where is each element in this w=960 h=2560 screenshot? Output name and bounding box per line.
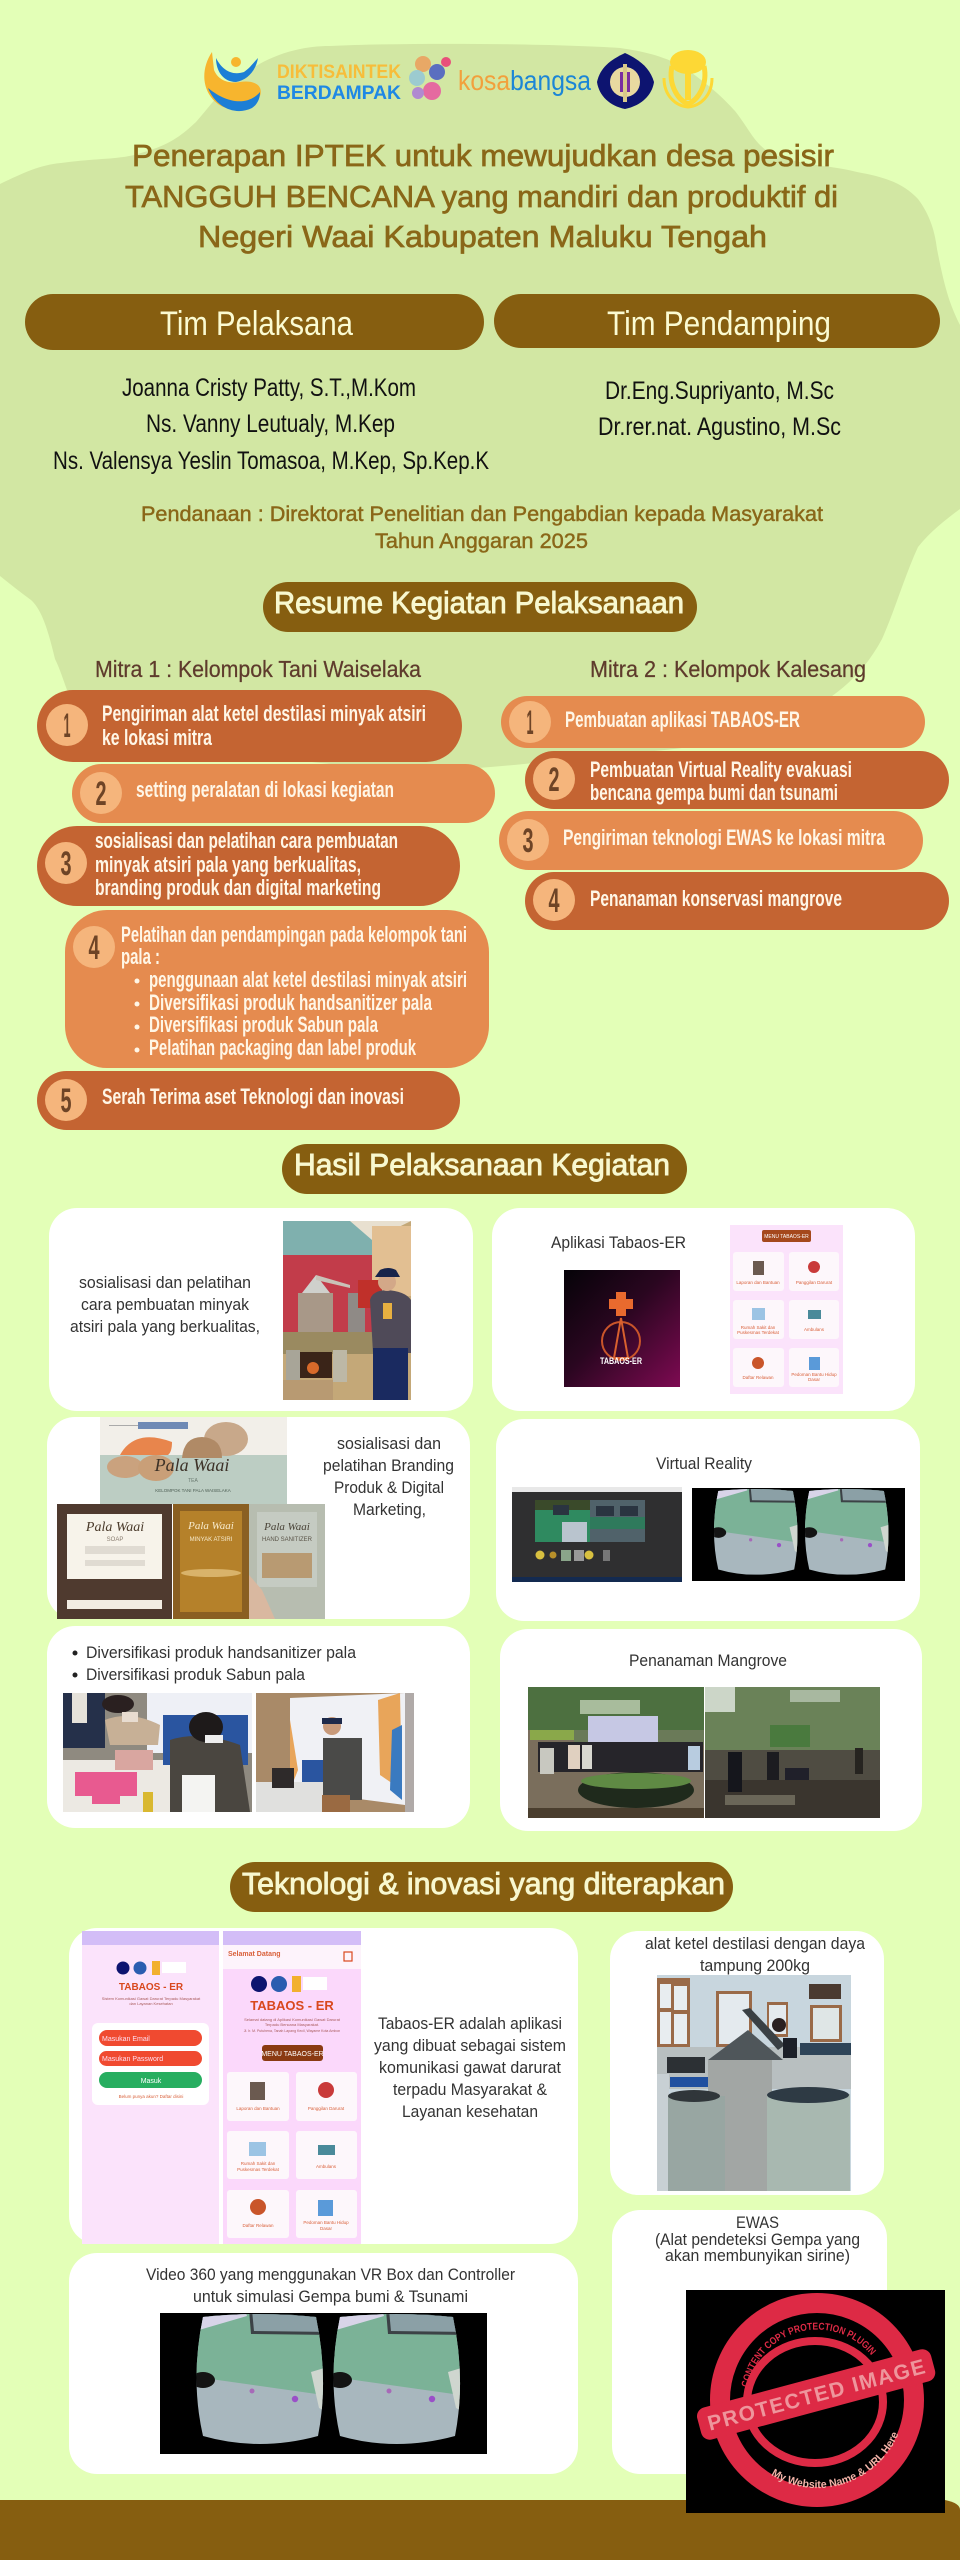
step 5	[37, 1071, 460, 1130]
screenshot: menu: Selamat Datang	[228, 1951, 281, 1958]
funding text: Pendanaan : Direktorat Penelitian dan Pengabdian kepada Masyarakat	[141, 503, 823, 526]
panel: sosialisasi minyak atsiri	[49, 1208, 473, 1411]
title: TANGGUH BENCANA yang mandiri dan produktif di	[125, 179, 838, 214]
panel: EWAS: (Alat pendeteksi Gempa yang	[655, 2230, 860, 2249]
panel: EWAS: EWAS	[736, 2213, 779, 2232]
background blob	[0, 44, 960, 769]
app menu screenshot: Puskesmas Terdekat	[737, 1330, 780, 1335]
panel: Penanaman Mangrove	[500, 1629, 922, 1831]
logo: university shield	[597, 53, 654, 109]
screenshot: login: Masuk	[141, 2078, 162, 2085]
step 4: Diversifikasi produk Sabun pala	[149, 1012, 379, 1037]
step 3: 3	[522, 822, 534, 860]
poster: hand sanitizer: Pala Waai	[263, 1521, 310, 1533]
screenshot: menu: Jl. Ir. M. Putuhena, Tanah Lapang Kecil, Wayame Kota Ambon	[244, 2029, 340, 2033]
icon: Tabaos-ER app	[564, 1270, 680, 1387]
app menu screenshot	[730, 1225, 843, 1394]
step 4: 4	[88, 929, 100, 967]
logos row	[204, 50, 712, 111]
protected image stamp: CONTENT COPY PROTECTION PLUGIN	[742, 2322, 876, 2386]
panel: Mitra 2 steps	[499, 696, 949, 930]
screenshot: menu: Dasar	[320, 2226, 332, 2231]
step 4: 4	[548, 882, 560, 920]
description text: yang dibuat sebagai sistem	[374, 2036, 566, 2055]
screenshot: VR stereo view	[692, 1486, 905, 1581]
panel: diversifikasi produk: Diversifikasi produk handsanitizer pala	[86, 1643, 357, 1662]
panel: Video 360	[69, 2253, 578, 2474]
screenshot: login: Belum punya akun? Daftar disini	[119, 2094, 183, 2099]
step 2: 2	[96, 775, 106, 813]
step 4: penggunaan alat ketel destilasi minyak atsiri	[149, 967, 467, 992]
heading: Mitra 2: Mitra 2 : Kelompok Kalesang	[590, 656, 866, 682]
logo: gold emblem	[664, 50, 712, 107]
panel: branding produk: Marketing,	[353, 1500, 426, 1519]
screenshot: menu: Daftar Relawan	[242, 2223, 274, 2228]
step 2: Pembuatan Virtual Reality evakuasi	[590, 757, 852, 782]
panel: Mitra 1 steps	[37, 690, 495, 1130]
step 3	[37, 826, 460, 906]
panel: branding produk	[47, 1417, 470, 1619]
screenshot: login: dan Layanan Kesehatan	[129, 2001, 173, 2006]
poster: soap	[57, 1504, 172, 1619]
heading: Mitra 1: Mitra 1 : Kelompok Tani Waiselaka	[95, 656, 421, 682]
screenshot: menu	[223, 1931, 361, 2244]
photo: distillation kettles	[657, 1975, 851, 2191]
heading pill: Tim Pendamping: Tim Pendamping	[607, 305, 831, 343]
screenshot: menu: TABAOS - ER	[250, 1998, 334, 2013]
app menu screenshot: Panggilan Darurat	[796, 1280, 833, 1285]
panel: branding produk: sosialisasi dan	[337, 1434, 441, 1453]
step 2	[72, 764, 495, 823]
panel: sosialisasi minyak atsiri: cara pembuatan minyak	[81, 1295, 249, 1314]
title: Penerapan IPTEK untuk mewujudkan desa pesisir	[132, 138, 834, 173]
poster: soap: Pala Waai	[85, 1520, 144, 1535]
poster: Pala Waai nutmeg: Pala Waai	[154, 1455, 229, 1475]
poster: soap: SOAP	[107, 1537, 123, 1543]
heading pill: Tim Pendamping	[494, 294, 940, 348]
description text: Tabaos-ER adalah aplikasi	[378, 2014, 562, 2033]
screenshot: login: Sistem Komunikasi Gawat Darurat Terpadu Masyarakat	[102, 1996, 201, 2001]
step 4: pala :	[121, 944, 160, 969]
names: Tim Pelaksana: Joanna Cristy Patty, S.T.,M.Kom	[122, 374, 416, 402]
names: Tim Pelaksana	[53, 374, 489, 475]
step 1: 1	[526, 704, 534, 742]
funding text: Tahun Anggaran 2025	[375, 530, 588, 553]
panel: Virtual Reality	[496, 1419, 920, 1621]
screenshot: login	[82, 1931, 219, 2244]
heading: Hasil Pelaksanaan Kegiatan	[282, 1144, 687, 1194]
panel: branding produk: pelatihan Branding	[323, 1456, 454, 1475]
screenshot: menu: MENU TABAOS-ER	[261, 2051, 324, 2058]
screenshot: menu: Terpadu Bencana Masyarakat.	[265, 2022, 319, 2027]
logo text: DIKTISAINTEK BERDAMPAK: DIKTISAINTEK	[277, 62, 401, 83]
photo: product workshop	[63, 1693, 252, 1812]
step 1	[37, 690, 462, 762]
icon: Tabaos-ER app: TABAOS-ER	[600, 1356, 642, 1366]
description text: terpadu Masyarakat &	[393, 2080, 548, 2099]
step 2: 2	[548, 761, 560, 799]
poster: hand sanitizer	[249, 1504, 325, 1619]
step 4: Penanaman konservasi mangrove	[590, 886, 842, 911]
poster: Pala Waai nutmeg	[100, 1417, 287, 1504]
panel: EWAS	[612, 2210, 887, 2474]
description text: komunikasi gawat darurat	[379, 2058, 561, 2077]
description text: Layanan kesehatan	[402, 2102, 538, 2121]
step 2: bencana gempa bumi dan tsunami	[590, 780, 838, 805]
step 3: 3	[60, 845, 72, 883]
panel: ketel destilasi: alat ketel destilasi dengan daya	[645, 1934, 865, 1953]
logo: kosabangsa mark	[409, 56, 451, 100]
app menu screenshot: Laporan dan Bantuan	[736, 1280, 780, 1285]
title: Negeri Waai Kabupaten Maluku Tengah	[198, 219, 767, 254]
app menu screenshot: Pedoman Bantu Hidup	[791, 1372, 837, 1377]
heading: Teknologi & inovasi yang diterapkan	[230, 1862, 733, 1912]
heading: Resume Kegiatan Pelaksanaan: Resume Kegiatan Pelaksanaan	[274, 585, 684, 620]
screenshot: login: Masukan Password	[102, 2056, 163, 2063]
names: Tim Pelaksana: Ns. Valensya Yeslin Tomasoa, M.Kep, Sp.Kep.K	[53, 447, 489, 475]
heading: Hasil Pelaksanaan Kegiatan: Hasil Pelaksanaan Kegiatan	[294, 1147, 670, 1182]
step 1: ke lokasi mitra	[102, 725, 213, 750]
title	[125, 138, 838, 254]
step 1: Pengiriman alat ketel destilasi minyak atsiri	[102, 701, 426, 726]
heading: Teknologi & inovasi yang diterapkan: Teknologi & inovasi yang diterapkan	[242, 1866, 725, 1901]
screenshot: menu: Rumah Sakit dan	[241, 2161, 276, 2166]
panel: EWAS: akan membunyikan sirine)	[665, 2246, 850, 2265]
step 1: 1	[64, 707, 70, 745]
logo text: DIKTISAINTEK BERDAMPAK: BERDAMPAK	[277, 83, 401, 104]
screenshot: menu: Selamat datang di Aplikasi Komunikasi Gawat Darurat	[244, 2017, 341, 2022]
poster: Pala Waai nutmeg: KELOMPOK TANI PALA WAISELAKA	[155, 1488, 231, 1493]
panel: sosialisasi minyak atsiri: sosialisasi dan pelatihan	[79, 1273, 251, 1292]
screenshot: menu: Ambulans	[316, 2164, 337, 2169]
panel: branding produk: Produk & Digital	[334, 1478, 444, 1497]
app menu screenshot: Ambulans	[804, 1327, 825, 1332]
screenshot: login: TABAOS - ER	[119, 1982, 184, 1993]
step 3: minyak atsiri pala yang berkualitas,	[95, 852, 361, 877]
names: Tim Pendamping: Dr.Eng.Supriyanto, M.Sc	[605, 377, 834, 405]
app menu screenshot: Daftar Relawan	[742, 1375, 774, 1380]
photo: planting in mud	[705, 1687, 880, 1818]
panel: Aplikasi Tabaos-ER	[492, 1208, 915, 1411]
panel: Video 360: untuk simulasi Gempa bumi & Tsunami	[193, 2287, 468, 2306]
photo: group with seedlings	[528, 1687, 704, 1818]
photo: distillation kettle with man	[283, 1221, 411, 1400]
panel: Virtual Reality: Virtual Reality	[656, 1454, 752, 1473]
screenshot: menu: Panggilan Darurat	[308, 2106, 345, 2111]
panel: Penanaman Mangrove: Penanaman Mangrove	[629, 1651, 787, 1670]
screenshot: menu: Laporan dan Bantuan	[236, 2106, 280, 2111]
panel: ketel destilasi: tampung 200kg	[700, 1956, 810, 1975]
logo: Diktisaintek Berdampak	[204, 52, 261, 111]
step 2	[525, 751, 949, 809]
step 4: Pelatihan packaging dan label produk	[149, 1035, 417, 1060]
panel: Video 360: Video 360 yang menggunakan VR Box dan Controller	[146, 2265, 515, 2284]
app menu screenshot: Dasar	[808, 1377, 820, 1382]
protected image stamp	[686, 2290, 945, 2513]
panel: Tabaos-ER app	[69, 1928, 578, 2244]
description text	[374, 2014, 566, 2121]
step 4: Pelatihan dan pendampingan pada kelompok tani	[121, 922, 467, 947]
step 4	[65, 910, 489, 1068]
panel: diversifikasi produk	[47, 1626, 470, 1828]
panel: ketel destilasi	[610, 1931, 884, 2195]
poster: hand sanitizer: HAND SANITIZER	[262, 1537, 313, 1543]
funding text	[141, 503, 823, 553]
step 5: 5	[60, 1082, 72, 1120]
screenshot: login: Masukan Email	[102, 2036, 150, 2043]
names: Tim Pendamping: Dr.rer.nat. Agustino, M.Sc	[598, 413, 841, 441]
heading: Resume Kegiatan Pelaksanaan	[263, 582, 697, 632]
protected image stamp: PROTECTED IMAGE	[705, 2355, 928, 2436]
app menu screenshot: MENU TABAOS-ER	[764, 1234, 809, 1240]
names: Tim Pelaksana: Ns. Vanny Leutualy, M.Kep	[146, 410, 395, 438]
step 2: setting peralatan di lokasi kegiatan	[136, 777, 394, 802]
logo text: kosabangsa: kosabangsa	[458, 65, 591, 96]
heading pill: Tim Pelaksana: Tim Pelaksana	[160, 305, 353, 343]
step 3: branding produk dan digital marketing	[95, 875, 381, 900]
footer band	[0, 2500, 960, 2560]
step 1: Pembuatan aplikasi TABAOS-ER	[565, 707, 800, 732]
panel: sosialisasi minyak atsiri: atsiri pala yang berkualitas,	[70, 1317, 260, 1336]
step 3: sosialisasi dan pelatihan cara pembuatan	[95, 828, 398, 853]
poster: Pala Waai nutmeg: TEA	[188, 1478, 199, 1484]
names: Tim Pendamping	[598, 377, 841, 441]
screenshot: menu: Puskesmas Terdekat	[237, 2167, 280, 2172]
step 4: Diversifikasi produk handsanitizer pala	[149, 990, 433, 1015]
poster: minyak atsiri: MINYAK ATSIRI	[190, 1537, 233, 1543]
heading pill: Tim Pelaksana	[25, 294, 484, 350]
panel: Aplikasi Tabaos-ER: Aplikasi Tabaos-ER	[551, 1233, 686, 1252]
screenshot: menu: Pedoman Bantu Hidup	[303, 2220, 349, 2225]
step 5: Serah Terima aset Teknologi dan inovasi	[102, 1084, 404, 1109]
panel: diversifikasi produk: Diversifikasi produk Sabun pala	[86, 1665, 306, 1684]
poster: minyak atsiri	[173, 1504, 249, 1619]
app menu screenshot: Rumah Sakit dan	[741, 1325, 776, 1330]
step 1	[501, 696, 925, 748]
screenshot: Unity editor	[512, 1487, 682, 1582]
step 3	[499, 811, 923, 870]
screenshot: VR stereo view	[160, 2310, 487, 2454]
step 4	[525, 872, 949, 930]
protected image stamp: My Website Name & URL Here	[772, 2432, 898, 2488]
logo text: DIKTISAINTEK BERDAMPAK	[277, 62, 401, 104]
photo: presenter with banner	[256, 1693, 414, 1812]
poster: minyak atsiri: Pala Waai	[187, 1520, 234, 1532]
